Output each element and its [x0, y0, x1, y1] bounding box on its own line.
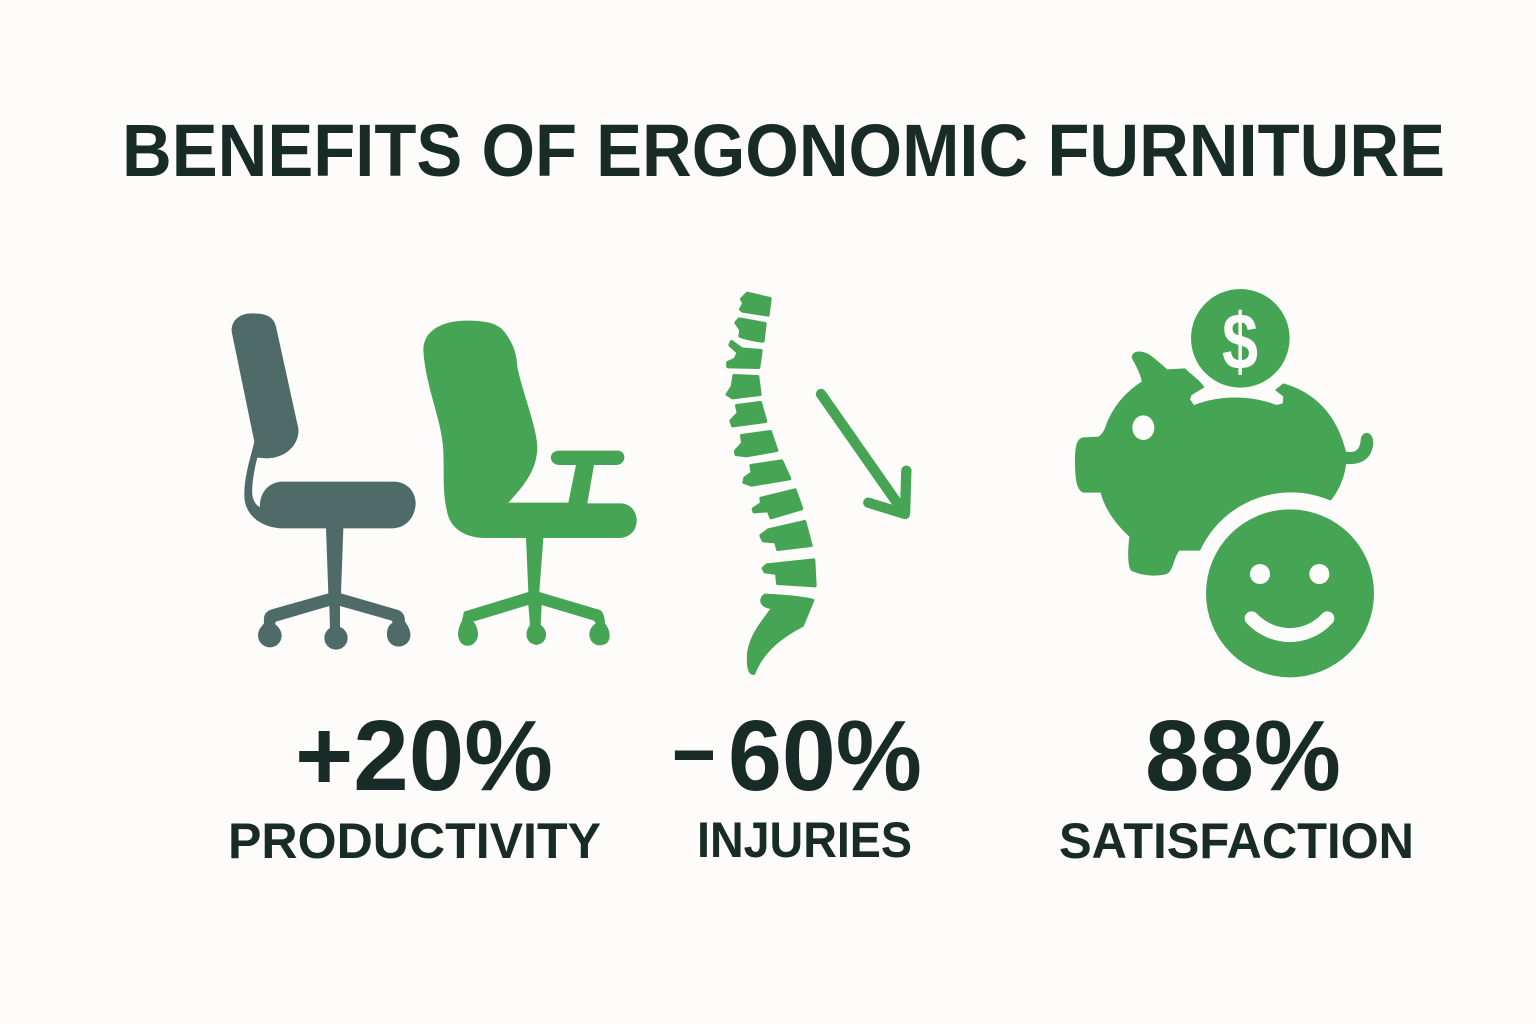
stat: injuries: 60%	[728, 700, 922, 812]
arrow: downward trend	[821, 394, 906, 514]
stat: injuries: INJURIES	[697, 812, 912, 868]
stat: productivity	[228, 700, 601, 869]
icon: piggy bank	[1075, 351, 1373, 576]
icon: dollar coin	[1191, 289, 1290, 388]
icon: spine	[727, 293, 815, 673]
stat: productivity: +20%	[295, 700, 553, 812]
icon: dollar coin: $	[1222, 297, 1258, 386]
stat: injuries: -	[669, 704, 719, 793]
icon: smiley face	[1206, 509, 1374, 677]
stat: satisfaction: 88%	[1145, 700, 1341, 812]
icon: ergonomic green chair	[423, 321, 637, 646]
icon: non-ergonomic grey chair	[232, 313, 416, 650]
stat: satisfaction	[1059, 700, 1414, 869]
stat: satisfaction: SATISFACTION	[1059, 813, 1414, 869]
title: BENEFITS OF ERGONOMIC FURNITURE	[122, 109, 1445, 192]
stat: productivity: PRODUCTIVITY	[228, 813, 601, 869]
stat: injuries	[669, 700, 922, 868]
